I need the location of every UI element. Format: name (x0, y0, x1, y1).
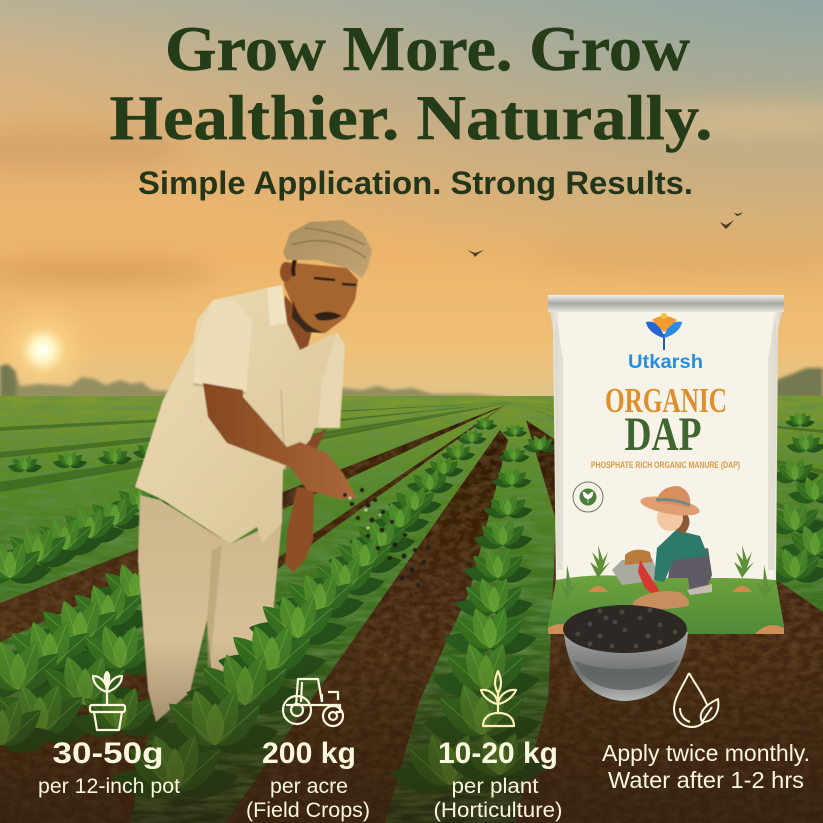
application instructions: Water after 1-2 hrs (608, 767, 804, 793)
brand logo (646, 313, 682, 350)
dose: 200 kg (262, 737, 356, 770)
title: Grow More. Grow (165, 13, 690, 84)
neck (280, 295, 312, 358)
DAP label: DAP (624, 408, 702, 461)
dose note: per acre (270, 775, 348, 798)
dose note: per 12-inch pot (38, 775, 180, 798)
birds (467, 212, 743, 257)
soil furrows (0, 405, 823, 823)
shirt (135, 285, 343, 544)
bag subtitle: PHOSPHATE RICH ORGANIC MANURE (DAP) (591, 460, 740, 470)
dose note: per plant (452, 775, 539, 798)
foreground crop leaves over legs (108, 553, 386, 804)
turban (283, 220, 372, 278)
icon: water drop with leaf (674, 673, 718, 727)
usage info: field crop dose (246, 679, 370, 822)
back forearm and hand (285, 487, 314, 573)
farmer (135, 220, 430, 722)
product bag: Utkarsh Organic DAP (548, 295, 784, 634)
arm (203, 383, 357, 499)
grass strip (548, 575, 784, 634)
application instructions: Apply twice monthly. (602, 740, 810, 766)
bowl of DAP granules (563, 605, 688, 701)
trousers (138, 495, 282, 722)
small plants on bag (560, 545, 775, 600)
subtitle: Simple Application. Strong Results. (138, 165, 693, 201)
face (284, 262, 358, 333)
dose: 10-20 kg (438, 737, 558, 770)
brand name: Utkarsh (628, 352, 703, 373)
dose note (246, 775, 370, 822)
distant tree line (0, 364, 823, 398)
usage info: horticulture dose (434, 671, 562, 822)
title: Healthier. Naturally. (110, 82, 713, 153)
dose note (434, 775, 562, 822)
far field furrows (0, 402, 823, 526)
title (110, 13, 713, 153)
dose note: (Horticulture) (434, 799, 562, 822)
usage info: pot dose (38, 672, 180, 798)
soft dark fade at bottom (0, 640, 823, 823)
sprinkled granules (343, 488, 430, 587)
organic badge (573, 482, 603, 512)
dose note: (Field Crops) (246, 799, 370, 822)
usage info: frequency (602, 673, 810, 793)
dose: 30-50g (52, 737, 164, 770)
crop rows (0, 411, 823, 798)
bag crimped top (548, 295, 784, 312)
farm kid illustration (612, 486, 712, 609)
sun (0, 294, 99, 406)
icon: seedling on mound (481, 671, 516, 726)
ORGANIC label: ORGANIC (605, 381, 727, 420)
icon: potted plant (90, 672, 125, 730)
application instructions (602, 740, 810, 793)
icon: tractor (283, 679, 343, 726)
